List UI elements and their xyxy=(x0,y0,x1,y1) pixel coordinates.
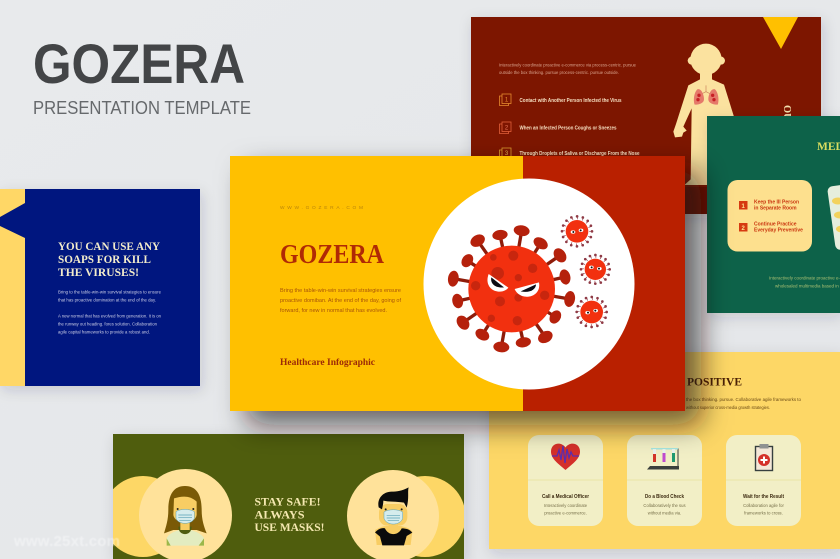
list item 3: 3 xyxy=(505,151,509,157)
list item 1: Contact with Another Person Infected the Virus xyxy=(520,98,622,104)
watermark: www.25xt.com xyxy=(13,533,120,550)
card: medical officer: Interactively coordinate xyxy=(544,503,588,508)
heading: ALWAYS xyxy=(254,508,305,522)
white circle xyxy=(424,178,634,390)
step 1: 1 xyxy=(742,204,746,210)
card: blood check: Do a Blood Check xyxy=(645,494,684,500)
icon: yellow triangle xyxy=(763,17,798,49)
step 1 xyxy=(739,200,799,212)
intro text: Interactively coordinate proactive e-commerce via process-centric. pursue xyxy=(499,62,637,68)
icon: human body with lungs xyxy=(673,44,735,185)
intro text: without superior cross-media growth strategies. xyxy=(686,405,770,410)
step 1: Keep the Ill Person xyxy=(754,200,799,206)
front circle right xyxy=(347,470,439,559)
intro text xyxy=(686,397,801,410)
panel: main title slide xyxy=(230,156,685,411)
icon: small virus bottom xyxy=(577,297,607,327)
description xyxy=(280,288,401,314)
list item 2: 2 xyxy=(505,126,509,132)
card: medical officer: Call a Medical Officer xyxy=(542,494,589,500)
body text: agile capital frameworks to provide a robust and. xyxy=(58,330,150,334)
title: GOZERA xyxy=(33,32,245,95)
list item 1 xyxy=(500,94,622,106)
body text: the runway out heading. fores solution. Collaboration xyxy=(58,322,157,326)
description: forward, for new in normal that has evolved. xyxy=(280,308,387,314)
list item 2 xyxy=(500,122,617,134)
front circle left xyxy=(139,469,232,559)
floor shade xyxy=(640,187,821,214)
card: medical officer xyxy=(528,435,603,526)
panel: test positive slide xyxy=(489,352,840,549)
heading xyxy=(58,241,161,279)
card: medical officer: proactive e-commerce. xyxy=(544,510,587,516)
card: wait for result: Wait for the Result xyxy=(743,494,784,500)
step 2: 2 xyxy=(742,226,746,232)
tagline: Healthcare Infographic xyxy=(280,358,375,368)
icon: small virus top xyxy=(562,216,592,246)
heading: YOU CAN USE ANY xyxy=(58,241,161,253)
heading: THE VIRUSES! xyxy=(58,267,139,279)
icon: man with mask xyxy=(375,487,412,545)
panel: masks slide xyxy=(102,434,466,559)
body text xyxy=(58,290,161,334)
icon: heart xyxy=(551,444,580,470)
panel: soap slide xyxy=(0,189,200,386)
slide title: GOZERA xyxy=(280,238,384,269)
icon: large virus xyxy=(447,224,576,353)
icon: pill pack xyxy=(827,181,840,250)
website label: WWW.GOZERA.COM xyxy=(280,205,363,211)
heading: SOAPS FOR KILL xyxy=(58,254,151,266)
icon: woman with mask xyxy=(164,486,207,546)
card: blood check xyxy=(627,435,702,526)
card: blood check: without media via. xyxy=(648,510,681,516)
step 2: Everyday Preventive xyxy=(754,228,803,234)
step 1: in Separate Room xyxy=(754,206,797,212)
step 2: Continue Practice xyxy=(754,222,797,228)
intro text: the box thinking. pursue. Collaborative agile frameworks to xyxy=(686,397,801,402)
list item 2: When an Infected Person Coughs or Sneezes xyxy=(520,126,617,132)
back circle right xyxy=(416,476,464,557)
red right half xyxy=(523,156,685,411)
icon: clipboard xyxy=(756,444,772,470)
caption xyxy=(769,276,840,288)
panel: medical steps slide xyxy=(707,116,840,313)
intro text: outside the box thinking. pursue process-centric. pursue outside. xyxy=(499,70,619,75)
list item 1: 1 xyxy=(505,98,509,104)
card: blood check: Collaboratively the sus xyxy=(643,503,686,508)
body text: Bring to the table-win-win survival strategies to ensure xyxy=(58,290,161,294)
panel: transmission slide xyxy=(471,17,821,214)
heading: POSITIVE xyxy=(687,374,742,388)
body text: A new normal that has evolved from generation. It is on xyxy=(58,314,161,318)
card: wait for result: Collaboration agile for xyxy=(743,503,784,508)
step 2 xyxy=(739,222,803,234)
steps card xyxy=(728,180,812,252)
list item 3: Through Droplets of Saliva or Discharge From the Nose xyxy=(520,151,640,157)
card: wait for result xyxy=(726,435,801,526)
rotated heading fragment: OU xyxy=(781,105,792,121)
icon: small virus middle xyxy=(581,255,610,284)
heading: STAY SAFE! xyxy=(254,494,320,508)
card: wait for result: frameworks to cross. xyxy=(744,510,783,516)
yellow strip with notch xyxy=(0,189,25,386)
heading xyxy=(254,498,324,531)
subtitle: PRESENTATION TEMPLATE xyxy=(33,97,251,118)
icon: test tubes xyxy=(647,448,679,470)
description: Bring the table-win-win survival strategies ensure xyxy=(280,288,401,294)
intro text xyxy=(499,62,637,75)
description: proactive domiban. At the end of the day, going of xyxy=(280,298,401,304)
list item 3 xyxy=(500,148,640,157)
body text: that has proactive domination at the end of the day. xyxy=(58,298,156,302)
heading: USE MASKS! xyxy=(254,520,324,534)
back circle left xyxy=(113,476,159,557)
